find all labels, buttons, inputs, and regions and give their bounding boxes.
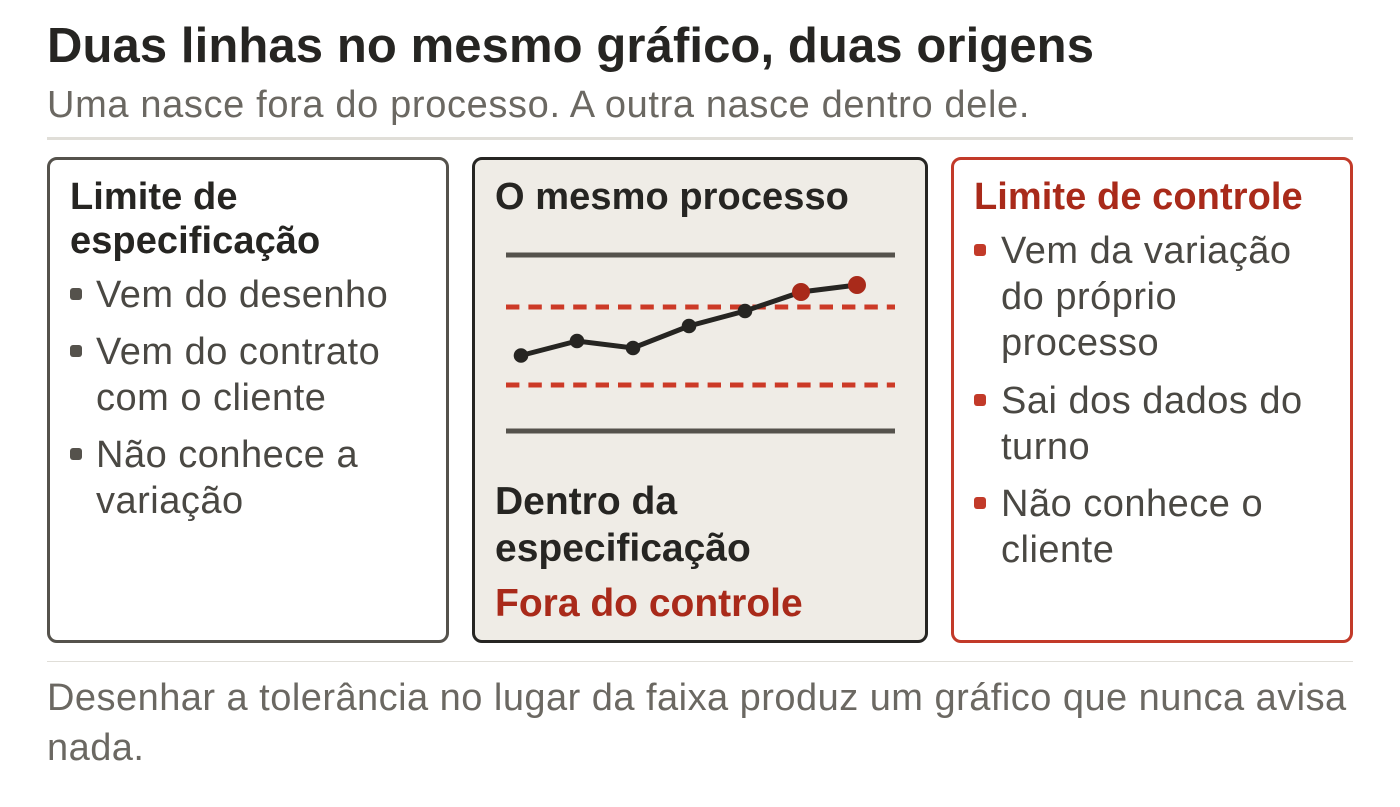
item [1001,230,1292,364]
bullet [70,448,82,460]
bullet [70,288,82,300]
item [1001,482,1263,570]
panel: limite de controle [951,157,1353,643]
verdict: dentro da especificação: Dentro da [495,480,677,523]
panel: limite de especificação [47,157,449,643]
verdict: fora do controle: Fora do controle [495,582,803,624]
heading: limite de especificação [70,176,320,262]
bullet [974,496,986,508]
item [1001,380,1303,468]
list: controle [974,230,1303,570]
bullet [974,394,986,406]
footer note: Desenhar a tolerância no lugar da faixa produz um gráfico que nunca avisa [47,677,1347,719]
heading: limite de especificação: especificação [70,220,320,262]
footer note: nada. [47,727,144,769]
chart: control chart [506,252,895,434]
item: processo [1001,322,1159,364]
verdict: dentro da especificação [495,480,751,570]
item: variação [96,480,244,522]
bullet [70,344,82,356]
points out of control [792,276,866,301]
subtitle: Uma nasce fora do processo. A outra nasce dentro dele. [47,84,1030,126]
data line [521,285,857,356]
list: especificação [70,274,388,522]
item: Sai dos dados do [1001,380,1303,422]
verdict: dentro da especificação: especificação [495,527,751,570]
item [96,434,358,522]
title: Duas linhas no mesmo gráfico, duas origens [47,19,1094,73]
footer divider [47,661,1353,662]
item: turno [1001,426,1090,468]
item: com o cliente [96,376,326,418]
heading: limite de controle: Limite de controle [974,176,1303,218]
footer note [47,677,1347,769]
item: Vem da variação [1001,230,1292,272]
points in control [514,304,752,363]
item [96,330,380,418]
item: Não conhece a [96,434,358,476]
item: Vem do contrato [96,330,380,372]
specification limits [506,255,895,431]
panel: o mesmo processo [472,157,928,643]
bullet [974,244,986,256]
heading: o mesmo processo: O mesmo processo [495,176,849,218]
item: Vem do desenho [96,274,388,316]
header divider [47,137,1353,140]
item: cliente [1001,528,1114,570]
heading: limite de especificação: Limite de [70,176,238,218]
control limits [506,307,895,385]
item: do próprio [1001,276,1177,318]
item: Não conhece o [1001,482,1263,524]
